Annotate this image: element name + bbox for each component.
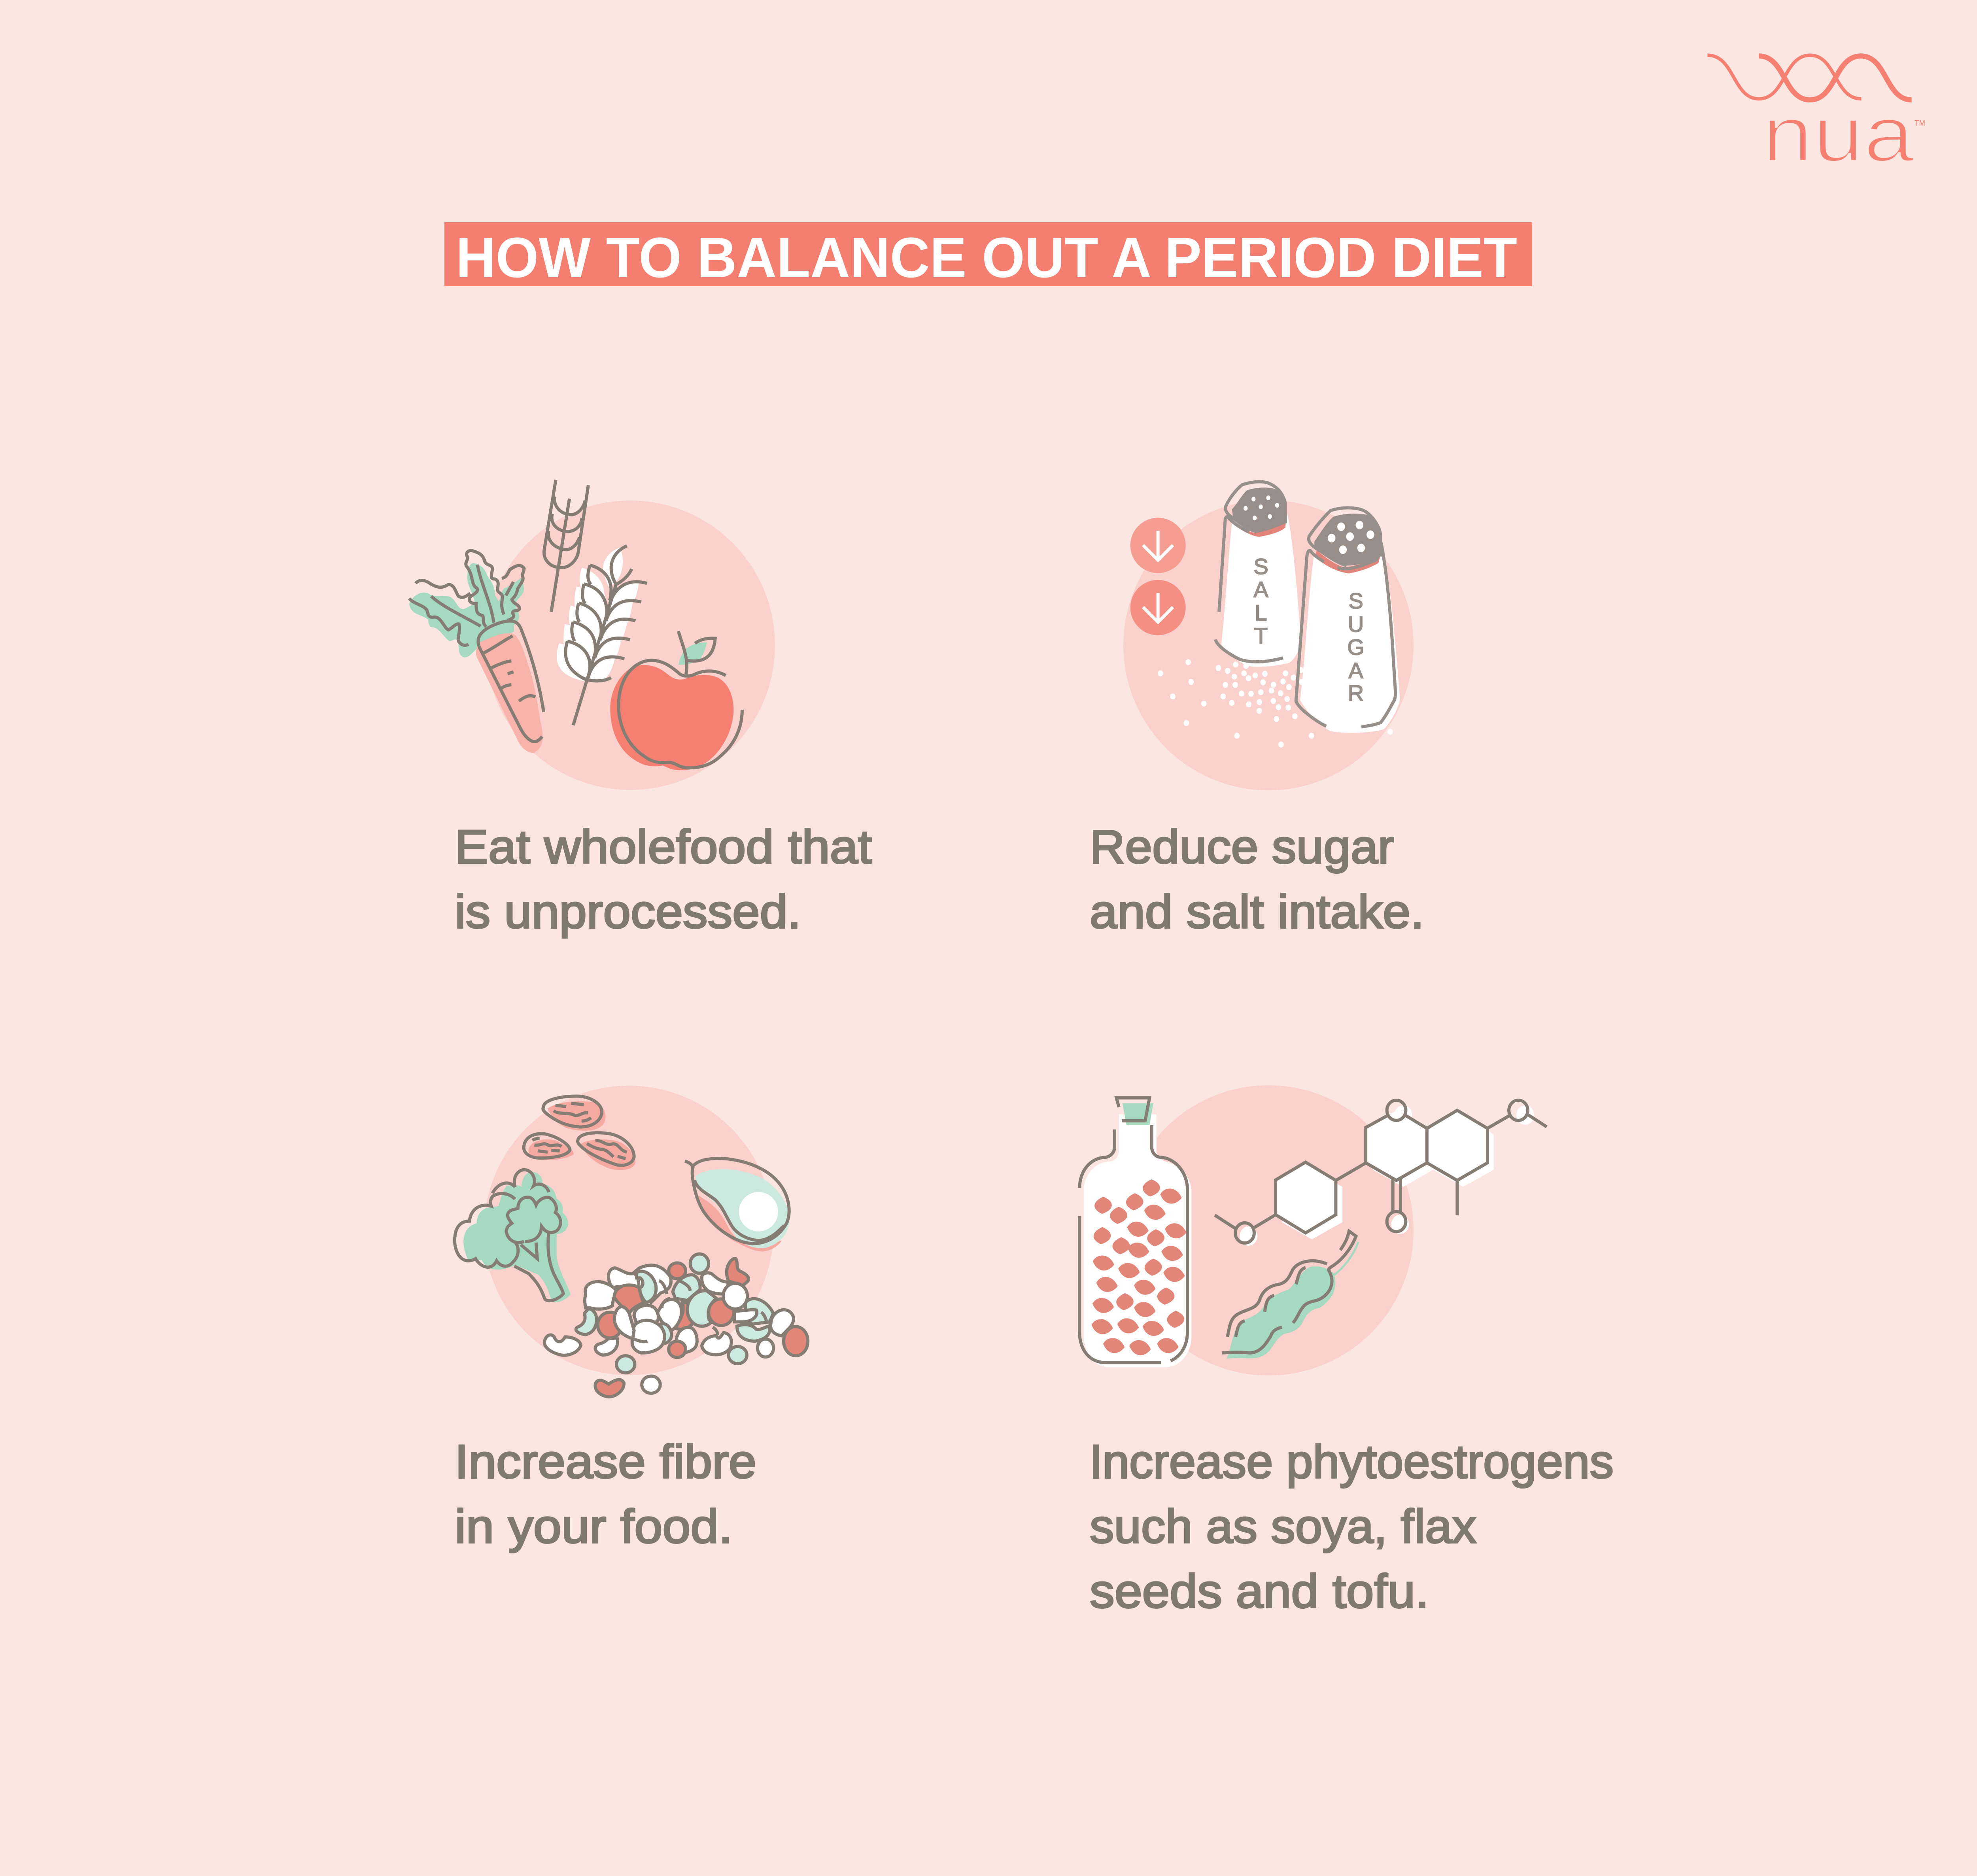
logo wordmark: nua bbox=[1762, 90, 1915, 178]
text: eat wholefood bbox=[455, 820, 872, 938]
logo: nua bbox=[1707, 55, 1925, 178]
logo wave bbox=[1707, 55, 1912, 100]
icon: beans and pulses bbox=[544, 1254, 808, 1397]
text: eat wholefood: Eat wholefood that bbox=[455, 820, 872, 873]
panel: fibre icon bbox=[455, 1086, 808, 1397]
background circle bbox=[484, 1086, 773, 1375]
icon: spilled grains bbox=[1158, 659, 1393, 748]
icon: salt shaker bbox=[1215, 482, 1301, 667]
icon: molecule bbox=[1215, 1100, 1547, 1246]
icon: down arrow two bbox=[1130, 580, 1186, 635]
text: increase fibre bbox=[455, 1435, 756, 1553]
text: increase phytoestrogens: Increase phytoestrogens bbox=[1089, 1435, 1614, 1488]
label: sugar: SUGAR bbox=[1347, 588, 1365, 705]
text: increase phytoestrogens bbox=[1089, 1435, 1614, 1618]
text: reduce sugar: and salt intake. bbox=[1090, 885, 1424, 938]
text: reduce sugar bbox=[1090, 820, 1424, 938]
panel: wholefood icon bbox=[409, 480, 775, 790]
label: salt: SALT bbox=[1253, 554, 1268, 648]
background circle bbox=[1123, 1085, 1414, 1375]
icon: wheat outline bbox=[544, 480, 588, 612]
panel: salt and sugar icon bbox=[1123, 482, 1414, 790]
icon: almonds bbox=[524, 1096, 635, 1170]
icon: down arrow one bbox=[1130, 518, 1186, 573]
text: increase fibre: Increase fibre bbox=[455, 1435, 756, 1488]
text: increase phytoestrogens: such as soya, flax bbox=[1090, 1500, 1476, 1553]
text: eat wholefood: is unprocessed. bbox=[455, 885, 801, 938]
icon: sugar shaker bbox=[1296, 508, 1400, 733]
trademark: TM bbox=[1915, 119, 1925, 128]
text: reduce sugar: Reduce sugar bbox=[1090, 820, 1394, 873]
panel: phytoestrogens icon bbox=[1079, 1085, 1547, 1375]
icon: carrot bbox=[409, 550, 544, 753]
icon: broccoli bbox=[455, 1170, 571, 1302]
icon: apple bbox=[610, 631, 742, 770]
icon: soya pod bbox=[1222, 1231, 1359, 1359]
text: increase phytoestrogens: seeds and tofu. bbox=[1090, 1565, 1429, 1618]
icon: bottle of seeds bbox=[1079, 1098, 1191, 1367]
background circle bbox=[1123, 500, 1414, 790]
icon: wheat with grains bbox=[557, 546, 647, 725]
icon: avocado bbox=[685, 1158, 790, 1252]
background circle bbox=[486, 501, 775, 790]
title text: HOW TO BALANCE OUT A PERIOD DIET bbox=[456, 226, 1517, 289]
text: increase fibre: in your food. bbox=[455, 1500, 733, 1553]
title banner bbox=[444, 222, 1532, 289]
